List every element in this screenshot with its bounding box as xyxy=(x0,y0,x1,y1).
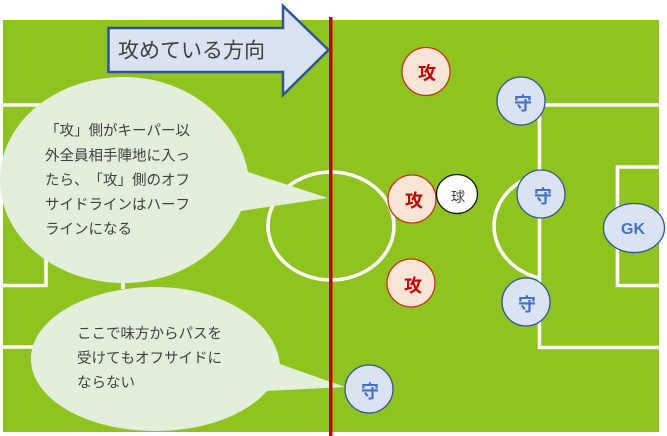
arrow: attacking direction xyxy=(108,6,328,95)
callout: offside line explanation xyxy=(0,77,328,283)
ball: 球 xyxy=(451,189,465,205)
defender 1 xyxy=(497,77,545,125)
callout: offside line explanation: ラインになる xyxy=(45,221,132,238)
callout: pass receiver explanation xyxy=(31,287,345,431)
goalkeeper: GK xyxy=(621,221,645,238)
callout: pass receiver explanation: ここで味方からパスを xyxy=(77,326,222,342)
attacker 1: 攻 xyxy=(418,62,436,84)
attacker 2: 攻 xyxy=(405,190,423,211)
ball xyxy=(436,174,478,214)
arrow: attacking direction: 攻めている方向 xyxy=(118,40,265,62)
goalkeeper xyxy=(604,204,664,252)
defender 4: 守 xyxy=(361,382,379,402)
callout: offside line explanation: たら、「攻」側のオフ xyxy=(45,172,190,189)
attacker 3: 攻 xyxy=(404,275,422,296)
callout: offside line explanation: サイドラインはハーフ xyxy=(45,198,190,214)
attacker 2 xyxy=(388,175,436,223)
attacker 3 xyxy=(387,259,435,307)
defender 3 xyxy=(502,278,550,326)
halfway offside line xyxy=(329,17,332,436)
defender 2 xyxy=(517,170,565,218)
callout: offside line explanation: 「攻」側がキーパー以 xyxy=(45,122,190,140)
attacker 1 xyxy=(402,48,450,96)
defender 3: 守 xyxy=(518,295,536,315)
callout: pass receiver explanation: ならない xyxy=(77,374,135,392)
defender 2: 守 xyxy=(534,187,552,207)
callout: pass receiver explanation: 受けてもオフサイドに xyxy=(77,350,222,367)
defender 4 xyxy=(345,365,393,413)
defender 1: 守 xyxy=(514,94,532,114)
callout: offside line explanation: 外全員相手陣地に入っ xyxy=(45,148,190,164)
